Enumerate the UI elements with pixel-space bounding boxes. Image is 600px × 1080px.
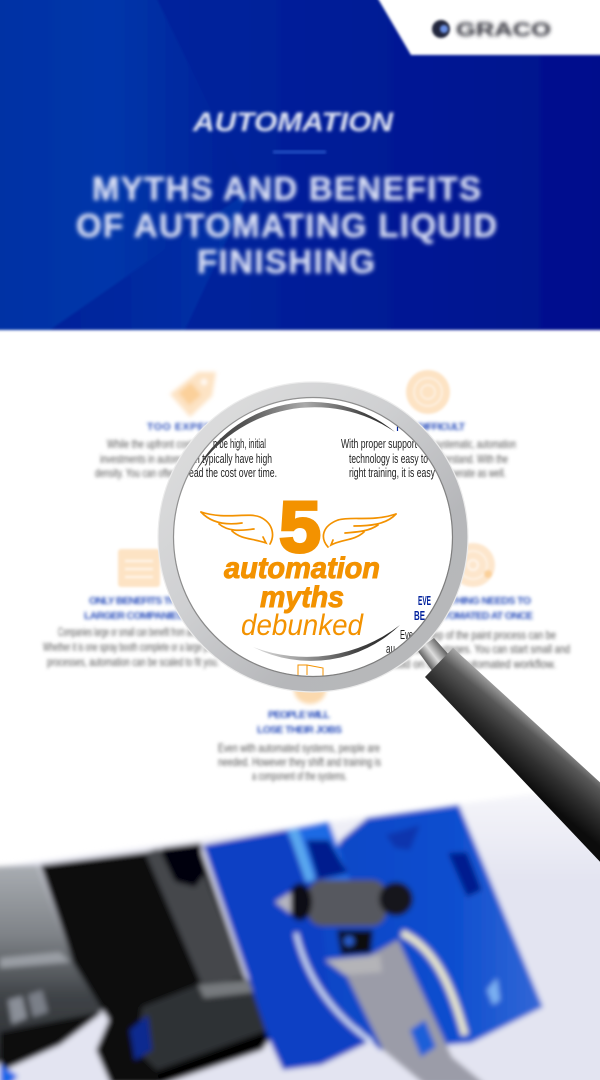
handle neck	[417, 638, 450, 672]
left grey part	[0, 865, 103, 1080]
ring	[158, 382, 468, 692]
myth 4: everything needs to be automated at once (blurred)	[386, 543, 570, 671]
lens text: left	[189, 438, 276, 477]
wing left	[201, 512, 273, 544]
logo panel: GRACO	[456, 20, 551, 41]
body text	[341, 437, 516, 480]
heading: BE AUTOMATED AT ONCE	[414, 610, 533, 622]
main title: MYTHS AND BENEFITS	[92, 170, 481, 207]
word: automation: automation	[224, 552, 380, 585]
icon: price tag	[170, 372, 216, 417]
body text: While the upfront cost can be high, initial	[107, 437, 266, 451]
blue parts	[203, 805, 543, 1070]
lens text: right	[341, 437, 436, 480]
myth 2: too difficult (blurred)	[341, 370, 516, 480]
lens text: left: n typically have high	[195, 452, 272, 466]
heading	[84, 595, 184, 622]
heading: ONLY BENEFITS THE	[89, 595, 183, 607]
spray gun head	[275, 880, 413, 955]
myth 3: only benefits larger companies (blurred)	[43, 549, 233, 669]
icon: target	[406, 370, 450, 414]
headline: 5 automation myths debunked	[201, 488, 396, 642]
body text: needed. However they shift and training is	[218, 755, 381, 769]
magnifying glass	[158, 382, 600, 866]
lens reflection bottom	[253, 625, 400, 661]
lens text: right: technology is easy to	[349, 452, 428, 466]
lens heading fragments: BE	[414, 609, 425, 623]
lens heading fragments: T	[395, 420, 400, 434]
kicker divider	[273, 150, 326, 154]
main title: OF AUTOMATING LIQUID	[76, 207, 497, 244]
icon: gear circle	[451, 543, 495, 587]
body text	[218, 741, 381, 783]
arm with cables	[296, 933, 486, 1080]
icon: calendar	[118, 549, 160, 587]
lens text: right: right training, it is easy	[349, 466, 436, 480]
body text: add on to your automated workflow.	[393, 657, 556, 671]
kicker: automation: AUTOMATION	[192, 107, 394, 137]
body text: right training, it is easy to operate as well.	[349, 466, 506, 480]
body text: Companies large or small can benefit from automating.	[58, 625, 222, 639]
body text	[43, 625, 233, 669]
black part	[40, 843, 276, 1080]
lens heading fragments: EVE	[418, 594, 431, 608]
body text: density. You can often spread the cost over time.	[95, 466, 277, 480]
lens body fragments: Eve	[400, 628, 413, 642]
heading	[414, 595, 533, 622]
header banner	[0, 0, 600, 330]
body text: Even with automated systems, people are	[218, 741, 380, 755]
main title	[76, 170, 497, 280]
icon: building	[294, 676, 326, 704]
body text	[95, 437, 277, 480]
handle grip	[425, 648, 600, 866]
body text: Whether it is one spray booth complete or a large paint line	[43, 640, 233, 654]
myth 5: people will lose their jobs (blurred)	[218, 676, 381, 783]
body text: Every step of the paint process can be	[400, 628, 556, 642]
lens	[186, 402, 440, 676]
numeral 5: 5	[279, 488, 321, 568]
heading	[257, 709, 342, 736]
icon fragment: building outline	[298, 665, 323, 676]
lens text: left: n be high, initial	[213, 437, 266, 451]
myth 1: too expensive (blurred)	[95, 372, 277, 480]
photo: robot spray gun over blue parts	[0, 785, 600, 1080]
word: myths: myths	[260, 581, 344, 614]
lens text: right: With proper support	[341, 437, 417, 451]
heading: TOO DIFFICULT	[395, 421, 466, 433]
body text	[386, 628, 570, 671]
heading: LARGER COMPANIES	[84, 610, 184, 622]
body text: processes, automation can be scaled to fit you.	[47, 655, 219, 669]
wing right	[323, 514, 396, 547]
lens body fragments: au	[386, 642, 395, 656]
heading: PEOPLE WILL	[268, 709, 331, 721]
heading: LOSE THEIR JOBS	[257, 724, 342, 736]
body text: technology is easy to understand. With the	[349, 452, 508, 466]
lens text: left: ead the cost over time.	[189, 466, 277, 480]
word: debunked: debunked	[241, 609, 364, 642]
body text: With proper support and a systematic, automation	[341, 437, 516, 451]
main title: FINISHING	[197, 243, 375, 280]
lens heading fragments	[395, 420, 431, 623]
heading: TOO EXPENSIVE	[147, 421, 239, 433]
body text: a component of the systems.	[252, 769, 347, 783]
lens reflection top	[195, 402, 395, 473]
body text: investments in automation typically have high	[100, 452, 272, 466]
heading: EVERYTHING NEEDS TO	[417, 595, 531, 607]
lens body fragments	[386, 630, 412, 653]
logo panel	[377, 0, 600, 55]
